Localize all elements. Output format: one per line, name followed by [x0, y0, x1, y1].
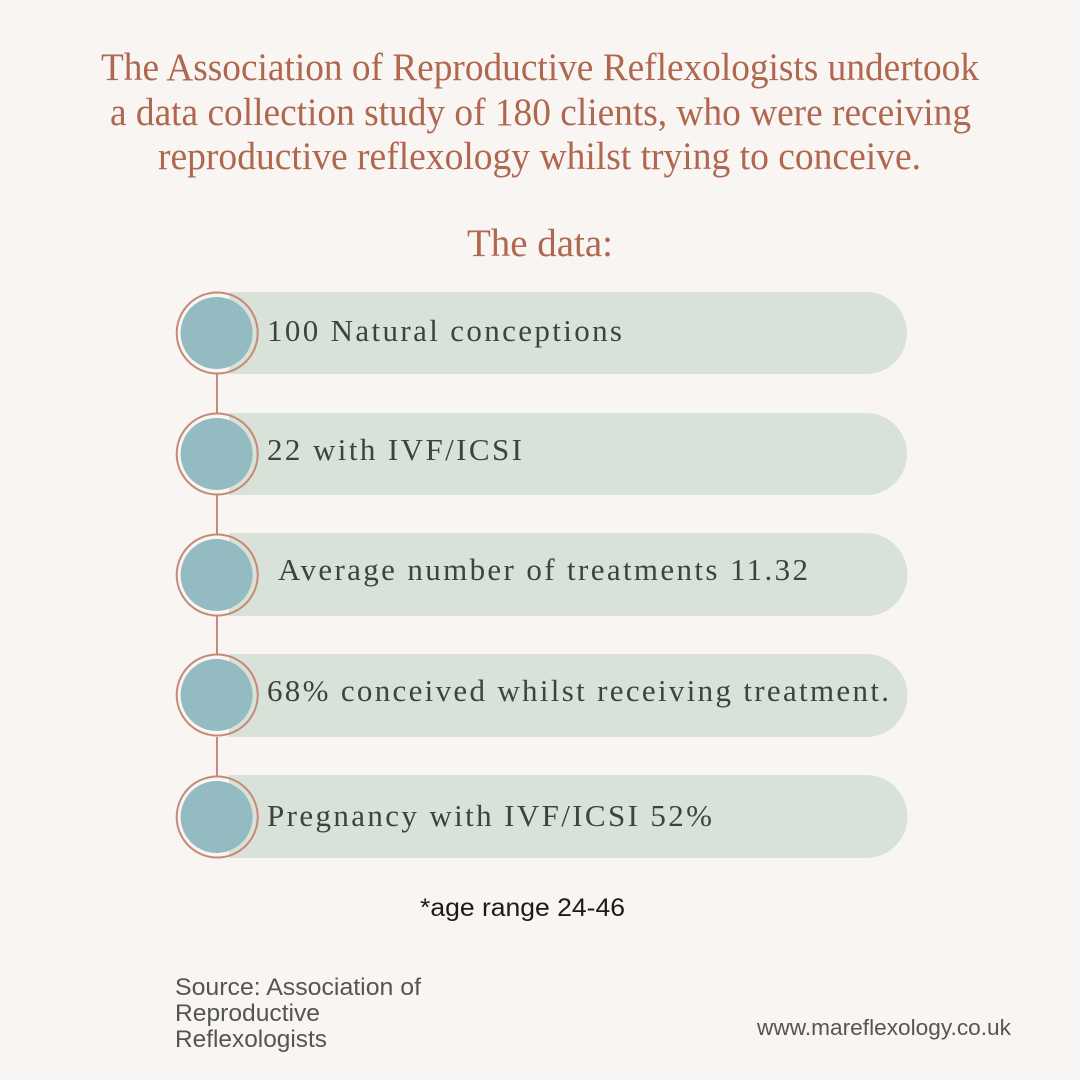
item: natural conceptions: [177, 292, 907, 374]
title: a data collection study of 180 clients, who were receiving: [110, 91, 971, 134]
source: [175, 974, 421, 1053]
title: [101, 46, 979, 178]
source: Source: Association of: [175, 974, 421, 1001]
item: pregnancy with IVF/ICSI: [177, 775, 907, 858]
title: The Association of Reproductive Reflexologists undertook: [101, 46, 979, 89]
item: IVF/ICSI count: [177, 413, 907, 495]
website: www.mareflexology.co.uk: [756, 1015, 1012, 1040]
source: Reflexologists: [175, 1026, 327, 1053]
item: average treatments: [177, 533, 907, 616]
heading: the data: The data:: [467, 222, 613, 265]
item: pregnancy with IVF/ICSI: Pregnancy with IVF/ICSI 52%: [267, 798, 712, 833]
item: conceived during treatment: [177, 654, 907, 737]
item: average treatments: Average number of treatments 11.32: [278, 552, 808, 587]
source: Reproductive: [175, 1000, 320, 1027]
age range note: *age range 24-46: [420, 894, 625, 922]
item: conceived during treatment: 68% conceived whilst receiving treatment.: [267, 673, 889, 708]
item: natural conceptions: 100 Natural conceptions: [267, 313, 622, 348]
title: reproductive reflexology whilst trying to conceive.: [158, 135, 921, 178]
connector line: [216, 374, 218, 776]
item: IVF/ICSI count: 22 with IVF/ICSI: [267, 432, 522, 467]
